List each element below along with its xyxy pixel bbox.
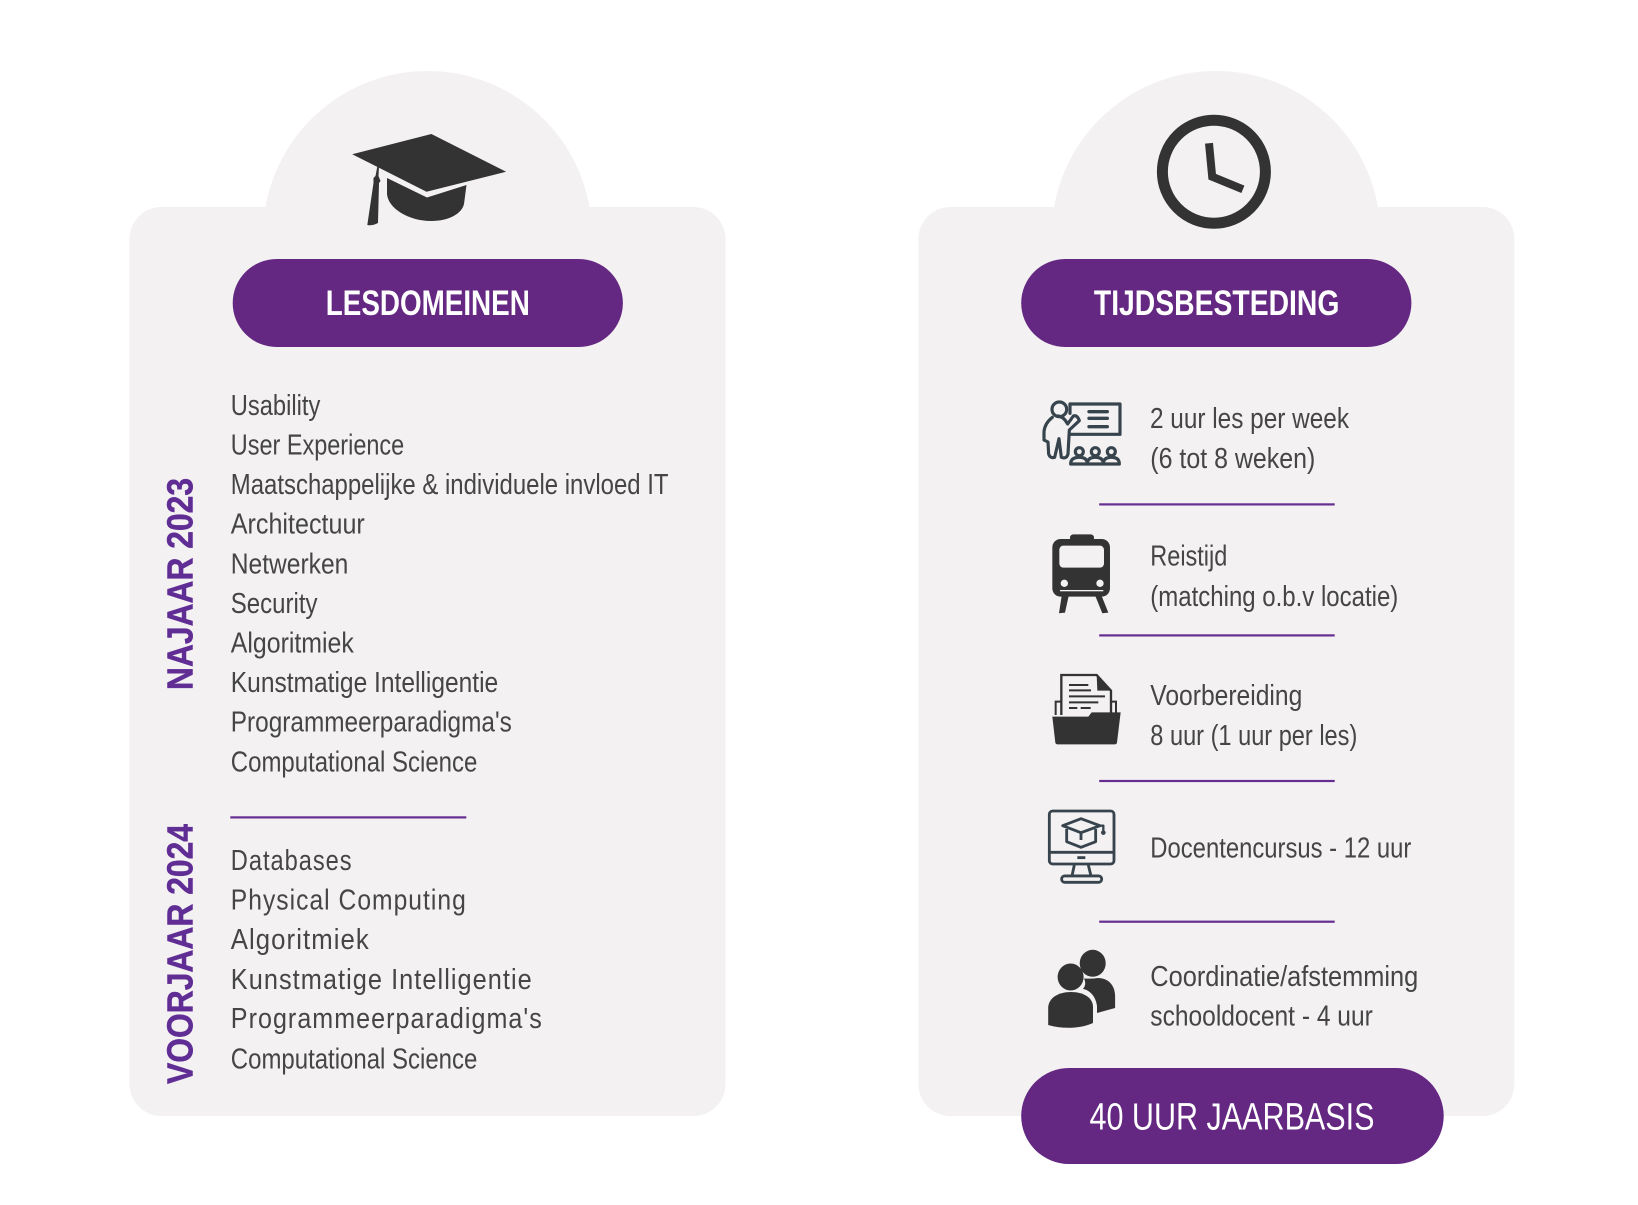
text: coordinatie: Coordinatie/afstemming <box>1150 961 1418 993</box>
list: najaar 2023 courses: Usability <box>231 390 321 422</box>
list: najaar 2023 courses: Computational Science <box>231 746 477 778</box>
total pill: 40 uur jaarbasis <box>1021 1068 1444 1164</box>
label: voorjaar 2024: VOORJAAR 2024 <box>160 824 201 1084</box>
panel dome <box>263 71 592 400</box>
text: docentencursus: Docentencursus - 12 uur <box>1150 832 1412 864</box>
list: najaar 2023 courses <box>231 390 669 778</box>
list: najaar 2023 courses: Maatschappelijke & individuele invloed IT <box>231 469 669 501</box>
text: reistijd: Reistijd <box>1150 541 1227 573</box>
list: najaar 2023 courses: Kunstmatige Intelligentie <box>231 667 498 699</box>
list: voorjaar 2024 courses: Databases <box>231 845 353 877</box>
text: coordinatie <box>1150 961 1418 1032</box>
text: voorbereiding: Voorbereiding <box>1150 680 1302 712</box>
panel body <box>918 207 1514 1116</box>
heading pill: lesdomeinen: LESDOMEINEN <box>326 284 530 323</box>
text: lessen: 2 uur les per week <box>1150 403 1349 435</box>
list: najaar 2023 courses: Architectuur <box>231 508 365 540</box>
panel: lesdomeinen <box>130 71 726 1116</box>
heading pill: lesdomeinen <box>233 259 623 347</box>
panel: tijdsbesteding <box>918 71 1514 1116</box>
icon: teacher at board <box>1044 402 1120 464</box>
icon: two people <box>1048 950 1115 1028</box>
panel body <box>130 207 726 1116</box>
list: voorjaar 2024 courses: Algoritmiek <box>231 924 370 956</box>
list: najaar 2023 courses: Security <box>231 588 318 620</box>
label: najaar 2023: NAJAAR 2023 <box>160 478 201 690</box>
text: reistijd: (matching o.b.v locatie) <box>1150 581 1398 613</box>
icon: clock <box>1162 120 1265 223</box>
text: lessen <box>1150 403 1349 475</box>
icon: monitor with graduation cap <box>1049 811 1114 882</box>
list: voorjaar 2024 courses: Kunstmatige Intelligentie <box>231 964 533 996</box>
icon: graduation cap <box>352 134 506 225</box>
text: voorbereiding: 8 uur (1 uur per les) <box>1150 720 1357 752</box>
text: reistijd <box>1150 541 1398 613</box>
list: voorjaar 2024 courses <box>231 845 543 1075</box>
text: lessen: (6 tot 8 weken) <box>1150 443 1315 475</box>
heading pill: tijdsbesteding: TIJDSBESTEDING <box>1094 284 1339 323</box>
text: voorbereiding <box>1150 680 1357 752</box>
list: voorjaar 2024 courses: Physical Computing <box>231 884 467 916</box>
list: voorjaar 2024 courses: Computational Science <box>231 1043 477 1075</box>
panel dome <box>1052 71 1380 400</box>
list: najaar 2023 courses: Algoritmiek <box>231 628 354 660</box>
list: najaar 2023 courses: Programmeerparadigma's <box>231 707 512 739</box>
list: najaar 2023 courses: User Experience <box>231 430 404 462</box>
total pill: 40 uur jaarbasis: 40 UUR JAARBASIS <box>1090 1096 1374 1138</box>
heading pill: tijdsbesteding <box>1021 259 1411 347</box>
text: coordinatie: schooldocent - 4 uur <box>1150 1000 1373 1032</box>
list: najaar 2023 courses: Netwerken <box>231 548 348 580</box>
icon: document folder <box>1052 674 1121 744</box>
icon: train <box>1052 534 1110 613</box>
list: voorjaar 2024 courses: Programmeerparadigma's <box>231 1003 543 1035</box>
